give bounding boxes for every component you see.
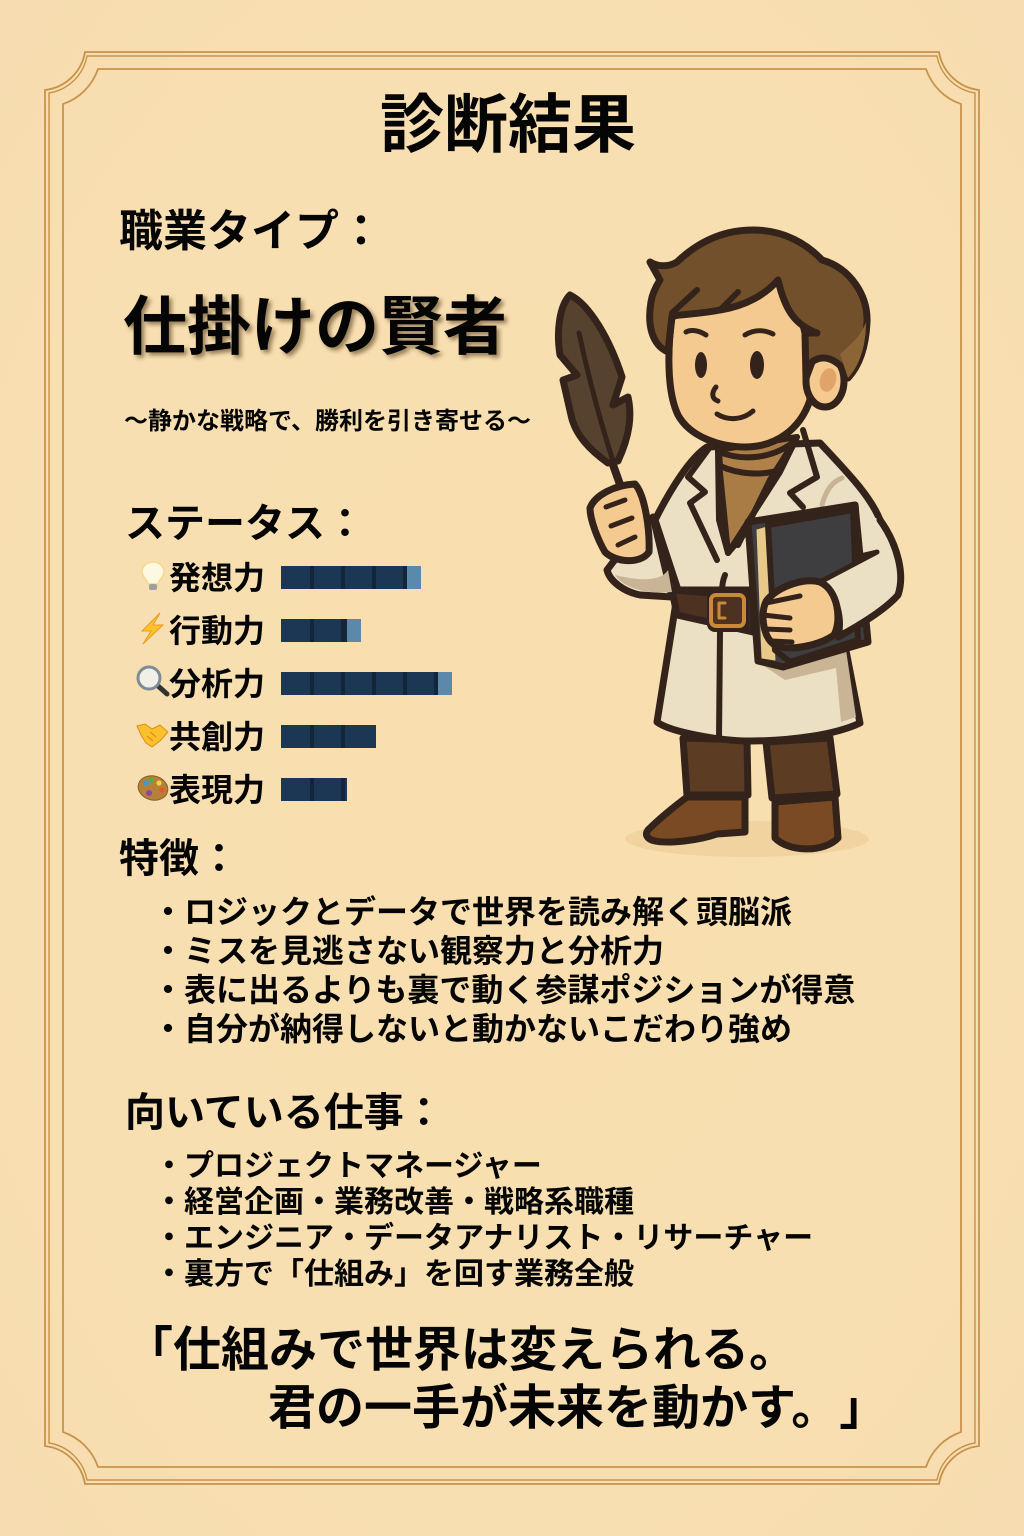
closing quote xyxy=(125,1324,887,1435)
list: suitable jobs: ・プロジェクトマネージャー xyxy=(154,1150,542,1183)
list: suitable jobs: ・エンジニア・データアナリスト・リサーチャー xyxy=(154,1222,813,1255)
job type name: 仕掛けの賢者 xyxy=(123,291,507,363)
status row: idea power xyxy=(141,560,421,596)
heading: job type: 職業タイプ： xyxy=(119,207,383,256)
heading: status: ステータス： xyxy=(125,502,365,546)
status row: idea power: 発想力 xyxy=(169,560,265,596)
panel: status bars xyxy=(136,560,452,808)
list: features: ・表に出るよりも裏で動く参謀ポジションが得意 xyxy=(152,972,855,1008)
tagline: ～静かな戦略で、勝利を引き寄せる～ xyxy=(124,408,531,435)
list: features: ・ミスを見逃さない観察力と分析力 xyxy=(152,933,664,969)
status row: analysis power xyxy=(136,666,452,702)
heading: features: 特徴： xyxy=(119,837,239,881)
list: features xyxy=(152,894,855,1047)
closing quote: 「仕組みで世界は変えられる。 xyxy=(125,1324,797,1377)
status row: co-creation power xyxy=(136,719,376,755)
status row: action power xyxy=(140,612,361,649)
list: features: ・ロジックとデータで世界を読み解く頭脳派 xyxy=(152,894,792,930)
status row: expression power: 表現力 xyxy=(169,772,265,808)
list: suitable jobs xyxy=(154,1150,813,1291)
title: 診断結果 xyxy=(380,89,636,161)
list: suitable jobs: ・裏方で「仕組み」を回す業務全般 xyxy=(154,1258,634,1291)
status row: analysis power: 分析力 xyxy=(169,666,265,702)
heading: suitable jobs: 向いている仕事： xyxy=(125,1091,444,1135)
status row: action power: 行動力 xyxy=(169,613,265,649)
closing quote: 君の一手が未来を動かす。」 xyxy=(268,1382,887,1435)
status row: co-creation power: 共創力 xyxy=(169,719,265,755)
status row: expression power xyxy=(138,772,347,808)
list: suitable jobs: ・経営企画・業務改善・戦略系職種 xyxy=(154,1186,634,1219)
list: features: ・自分が納得しないと動かないこだわり強め xyxy=(152,1011,792,1047)
